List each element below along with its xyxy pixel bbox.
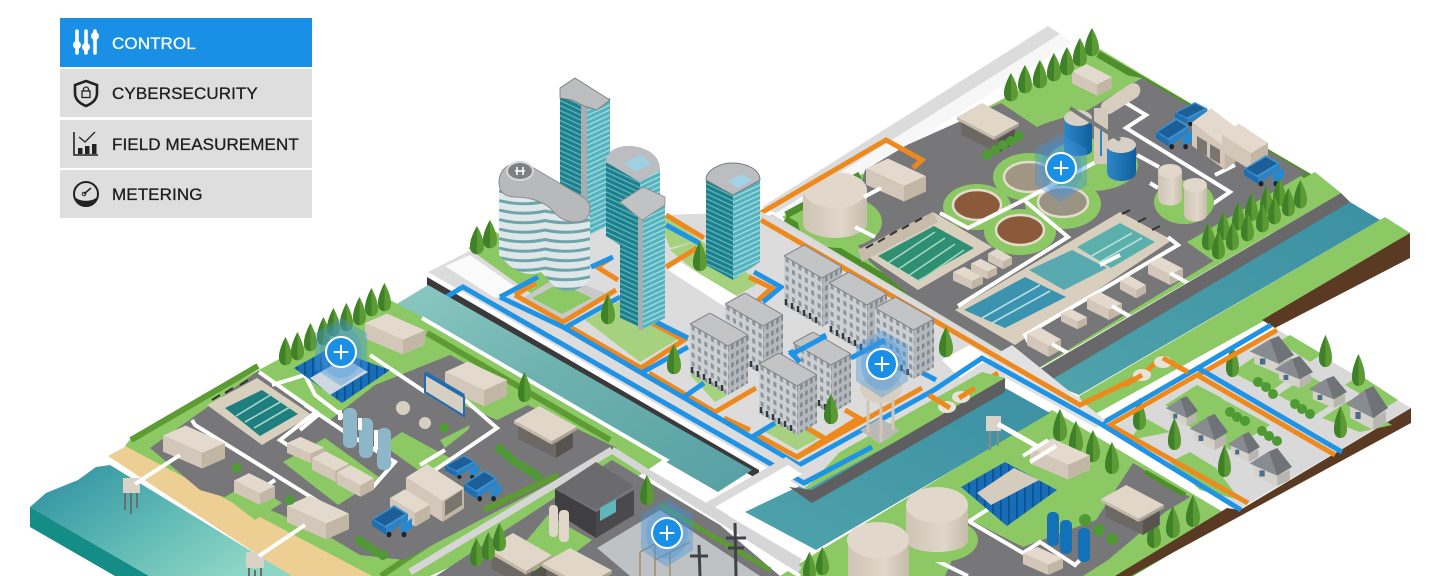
tree row north [1004, 28, 1099, 101]
tree garden east [1187, 172, 1341, 262]
pump stations [1027, 257, 1183, 357]
tower one [560, 78, 610, 238]
south pump building [1030, 438, 1090, 480]
legend item: control: CONTROL [112, 34, 196, 52]
city tree cluster [470, 220, 497, 254]
twin silos [1154, 164, 1214, 224]
west main building [390, 464, 464, 527]
legend item: control [60, 18, 312, 67]
button: water tower [856, 330, 908, 398]
flat roof building [514, 406, 577, 458]
legend item: metering: METERING [112, 185, 203, 204]
long building [445, 362, 507, 406]
white west road [445, 255, 520, 298]
panel: city block [404, 78, 1188, 518]
west pavement [150, 355, 617, 560]
west filter basin [207, 378, 312, 445]
valve pits [929, 356, 1188, 413]
inlet pipe [998, 424, 1040, 448]
legend item: metering [60, 170, 312, 218]
large storage tank [798, 172, 882, 248]
water tower [860, 373, 902, 444]
white road through city [668, 262, 760, 318]
pump building north [365, 313, 425, 355]
lower trees [470, 475, 654, 566]
west hedge near trucks [484, 475, 558, 510]
green yard near top [1001, 66, 1142, 125]
orange pipes [515, 215, 1188, 458]
cooling array [961, 462, 1057, 526]
tower four [706, 163, 760, 280]
white process pipes [855, 103, 1235, 345]
panel: wastewater treatment plant [761, 28, 1341, 372]
filter basin one [858, 212, 992, 290]
service boxes [287, 437, 374, 497]
blue building spurs [792, 336, 885, 362]
south canal inlet [986, 416, 1001, 450]
black canal wall [427, 277, 759, 480]
plant dark hedge border [785, 54, 1311, 366]
canal: west [395, 285, 752, 492]
legend item: cybersecurity: CYBERSECURITY [112, 84, 258, 103]
clarifier green pads [943, 139, 1138, 255]
south dark hedge [1128, 472, 1225, 576]
domes [396, 401, 431, 429]
sludge truck [1244, 155, 1284, 186]
east road to canal [1000, 345, 1105, 428]
green bank with soil edge [1079, 217, 1410, 417]
white process pipes [192, 318, 666, 512]
clarifiers [953, 162, 1088, 245]
west hedge [131, 333, 610, 576]
bush row [982, 131, 1024, 160]
south ground [780, 410, 1228, 576]
legend panel [60, 18, 312, 218]
panel: desalination plant [30, 283, 800, 576]
south blue tanks [1047, 512, 1090, 562]
west ground [125, 300, 666, 576]
south bushes [1079, 514, 1118, 545]
south small box [1023, 547, 1063, 575]
legend item: field measurement: FIELD MEASUREMENT [112, 135, 299, 154]
pump house [866, 159, 926, 201]
south storage tanks [847, 487, 978, 576]
plaza lots [585, 216, 830, 450]
icon: gauge [73, 181, 99, 207]
cooling array west [294, 348, 390, 403]
south canal water [745, 388, 1050, 550]
trees among towers [601, 241, 707, 374]
west trucks [372, 455, 501, 537]
lot under curved tower [468, 232, 580, 300]
panel: south water plant [745, 388, 1228, 576]
parked trucks [1156, 102, 1211, 149]
pressure tanks [340, 408, 391, 470]
yard frames [640, 536, 690, 576]
housing pipes [1110, 330, 1335, 503]
digesters [1064, 108, 1136, 181]
button: treatment plant [1035, 134, 1087, 202]
housing ground [1108, 330, 1411, 508]
south flat building [1101, 485, 1164, 535]
dark roof building [957, 103, 1019, 153]
intake pump buildings [163, 426, 349, 539]
outfall pipes [1052, 273, 1200, 366]
houses [1166, 336, 1388, 486]
top orange pipe loop [761, 140, 922, 213]
button: west plant [315, 318, 367, 386]
canal: north east [1035, 193, 1380, 395]
sand beach [108, 444, 372, 576]
west green plates [225, 425, 470, 520]
panel: housing block [1101, 325, 1411, 576]
plant pavement [848, 78, 1306, 370]
city river wall [789, 378, 1005, 503]
plant ground [782, 48, 1341, 372]
blue pipes [404, 225, 1101, 483]
south pavement [945, 463, 1190, 576]
lattice towers [690, 523, 746, 576]
front blue pipe over bank [804, 447, 872, 483]
legend item: field measurement [60, 120, 312, 168]
tower two [606, 146, 660, 258]
icon: bar chart [73, 132, 98, 156]
housing bushes [1225, 377, 1315, 446]
city front green bank [796, 372, 1005, 495]
small storage building [1072, 64, 1112, 96]
button: substation [641, 499, 693, 567]
ocean [30, 465, 292, 576]
curved tower [499, 162, 590, 291]
bridge road [700, 457, 806, 518]
west tree row [279, 283, 531, 402]
tower three [620, 187, 665, 330]
substation yard [597, 510, 760, 576]
south trees [803, 409, 1200, 576]
city base [428, 205, 1006, 490]
icon: shield [74, 80, 98, 108]
shore piers [123, 455, 305, 576]
membrane unit [425, 373, 464, 416]
bushes near domes [439, 423, 449, 433]
bottom flat buildings [487, 533, 612, 576]
legend item: cybersecurity [60, 69, 312, 117]
soil edge [1115, 408, 1411, 576]
far road strip [762, 26, 1072, 220]
road white pipe [650, 486, 800, 576]
small silos [549, 505, 569, 542]
small service boxes [953, 249, 1012, 289]
filter basin group [955, 210, 1172, 345]
plot greens [510, 515, 592, 576]
lawn plots [1130, 335, 1398, 500]
horizontal tank [1101, 83, 1140, 114]
city trees front [824, 327, 953, 424]
south west road frame [410, 450, 800, 572]
control building [555, 462, 634, 538]
icon: sliders [73, 29, 99, 55]
office buildings [690, 245, 934, 435]
west bush rows [232, 444, 542, 560]
housing blue pipes [1101, 325, 1342, 510]
housing trees [1133, 335, 1365, 477]
road north of plant [761, 214, 1088, 415]
south pipes [915, 440, 1085, 576]
substation hedge [660, 505, 770, 570]
process building [1192, 108, 1268, 170]
substation pavement [436, 460, 780, 576]
